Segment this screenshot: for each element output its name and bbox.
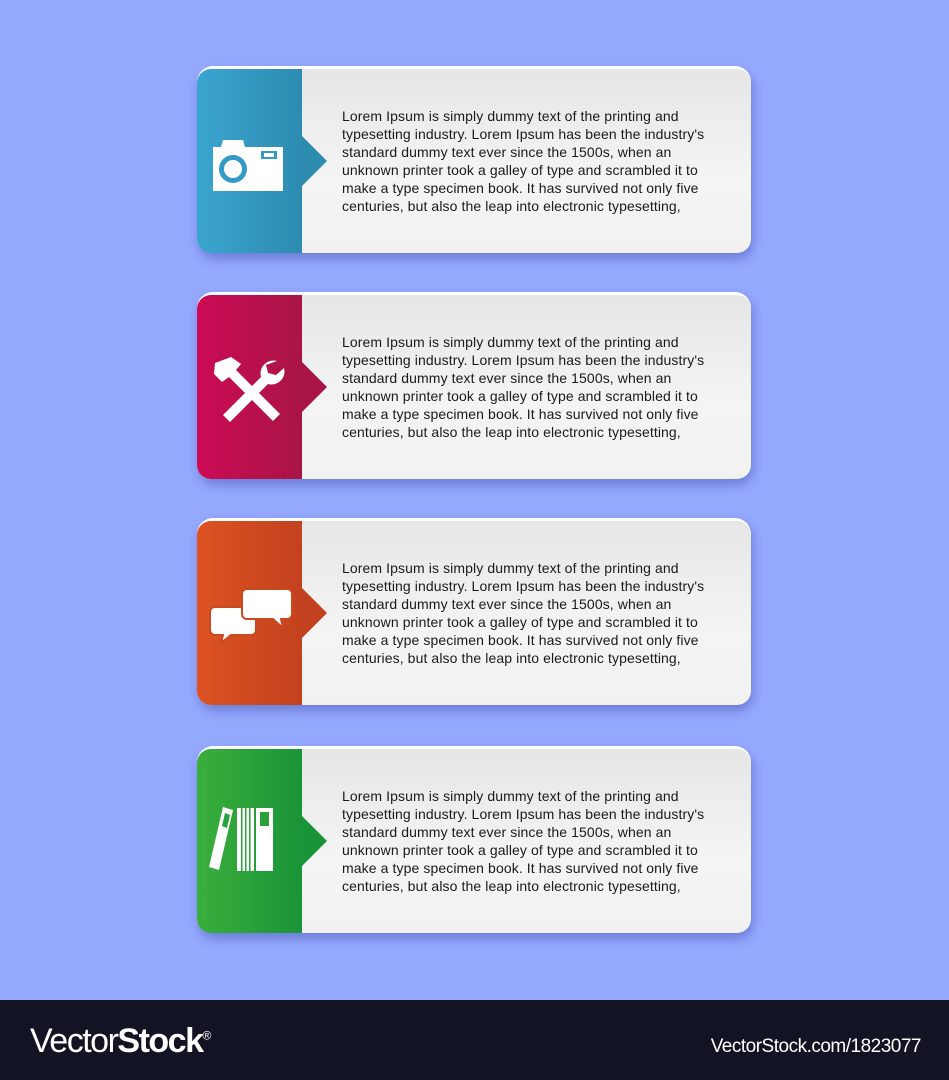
arrow <box>302 136 327 186</box>
icon: books <box>209 807 273 871</box>
text: standard dummy text ever since the 1500s, when an <box>342 596 671 612</box>
arrow <box>302 362 327 412</box>
text: standard dummy text ever since the 1500s, when an <box>342 824 671 840</box>
side: green <box>197 749 302 933</box>
text: Lorem Ipsum is simply dummy text of the printing and <box>342 334 679 350</box>
card 1: camera <box>197 66 751 253</box>
text: centuries, but also the leap into electronic typesetting, <box>342 198 681 214</box>
card 2: tools <box>197 292 751 479</box>
card 4: books <box>197 746 751 933</box>
text <box>342 108 704 214</box>
card 3: chat <box>197 518 751 705</box>
text: Lorem Ipsum is simply dummy text of the printing and <box>342 560 679 576</box>
arrow <box>302 588 327 638</box>
text: unknown printer took a galley of type and scrambled it to <box>342 388 698 404</box>
text: typesetting industry. Lorem Ipsum has been the industry's <box>342 578 704 594</box>
text: standard dummy text ever since the 1500s, when an <box>342 144 671 160</box>
url: VectorStock.com/1823077 <box>711 1036 921 1057</box>
icon: speech bubbles <box>209 588 291 645</box>
text: typesetting industry. Lorem Ipsum has been the industry's <box>342 806 704 822</box>
text: typesetting industry. Lorem Ipsum has been the industry's <box>342 352 704 368</box>
text: make a type specimen book. It has survived not only five <box>342 406 699 422</box>
text: centuries, but also the leap into electronic typesetting, <box>342 650 681 666</box>
text <box>342 788 704 894</box>
text: make a type specimen book. It has survived not only five <box>342 860 699 876</box>
text: typesetting industry. Lorem Ipsum has been the industry's <box>342 126 704 142</box>
side: orange <box>197 521 302 705</box>
text: Lorem Ipsum is simply dummy text of the printing and <box>342 108 679 124</box>
side: blue <box>197 69 302 253</box>
text: standard dummy text ever since the 1500s, when an <box>342 370 671 386</box>
text: centuries, but also the leap into electronic typesetting, <box>342 878 681 894</box>
text <box>342 334 704 440</box>
text: unknown printer took a galley of type and scrambled it to <box>342 162 698 178</box>
text: unknown printer took a galley of type and scrambled it to <box>342 614 698 630</box>
text: centuries, but also the leap into electronic typesetting, <box>342 424 681 440</box>
text: unknown printer took a galley of type and scrambled it to <box>342 842 698 858</box>
side: magenta <box>197 295 302 479</box>
footer band <box>0 1000 949 1080</box>
text: make a type specimen book. It has survived not only five <box>342 632 699 648</box>
arrow <box>302 816 327 866</box>
text: Lorem Ipsum is simply dummy text of the printing and <box>342 788 679 804</box>
icon: hammer and wrench <box>214 357 284 422</box>
icon: camera <box>213 140 283 191</box>
text: make a type specimen book. It has survived not only five <box>342 180 699 196</box>
text <box>342 560 704 666</box>
logo: VectorStock® <box>30 1022 210 1060</box>
